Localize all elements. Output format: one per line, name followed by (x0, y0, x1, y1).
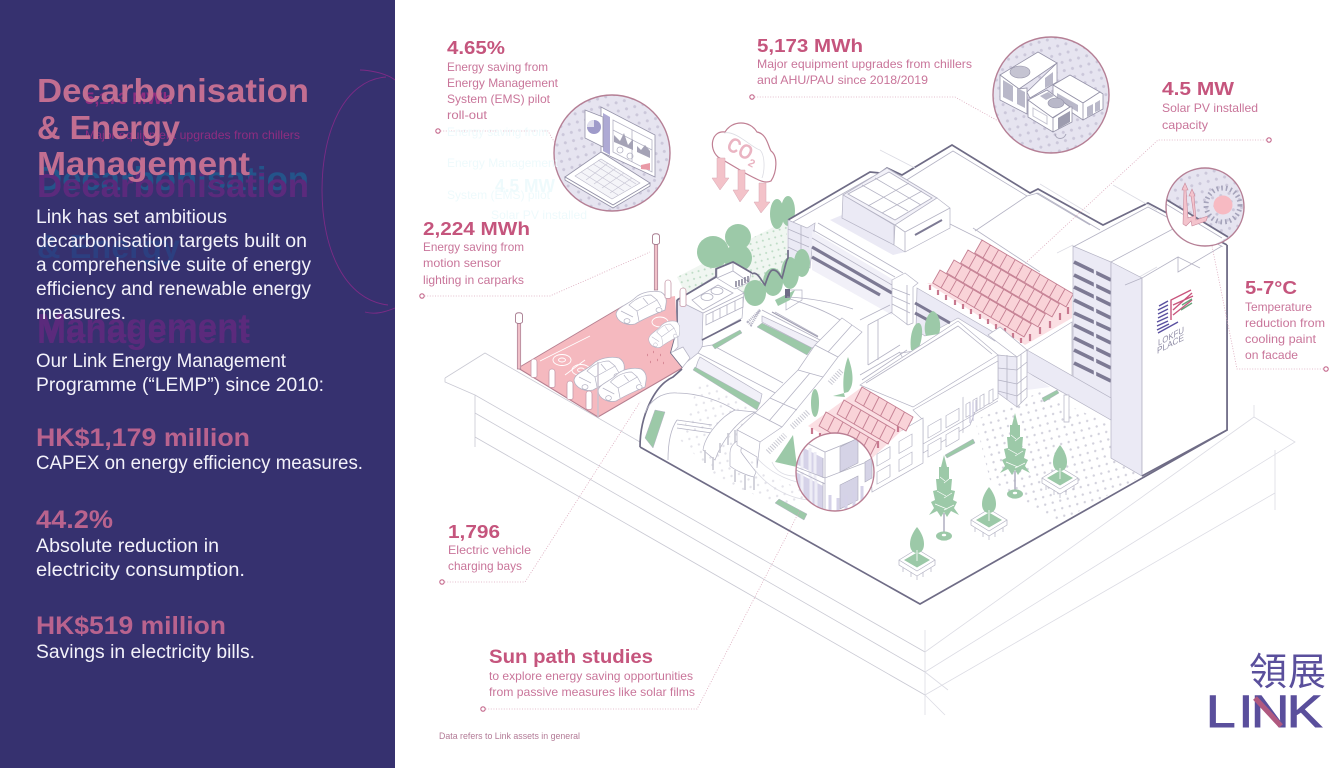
CO2 cloud with down arrows: CO (723, 133, 757, 165)
stat: savings: HK$519 million (36, 612, 226, 640)
ghost print marks: 5,173 MWh (85, 89, 173, 108)
ramp two (730, 438, 756, 477)
courtyard dotted paving (975, 392, 1142, 522)
callout: cooling paint: 5-7°C (1245, 278, 1297, 298)
lavender wall behind large solar array (916, 288, 1000, 341)
stat: electricity reduction: Absolute reduction in (36, 536, 219, 557)
callout: solar PV: Solar PV installed (1162, 101, 1258, 115)
ghost print marks: & Energy (37, 228, 181, 265)
callout: cooling paint: reduction from (1245, 316, 1325, 330)
stat: CAPEX: CAPEX on energy efficiency measures. (36, 453, 363, 474)
callout icon: sun and cooling paint (1166, 168, 1244, 250)
escalator (737, 305, 907, 468)
faint ghost printing on white area: System (EMS) pilot (447, 188, 551, 202)
callout: EMS saving: Energy Management (447, 76, 559, 90)
trees behind roof (911, 311, 940, 352)
callout: solar PV (1162, 79, 1258, 132)
intro text: a comprehensive suite of energy (36, 255, 311, 276)
callout: motion sensor lighting: lighting in carparks (423, 273, 524, 287)
isometric building illustration: Lok Fu Place (516, 145, 1227, 604)
ghost print marks: Decarbonisation (37, 160, 309, 197)
callout: cooling paint: Temperature (1245, 300, 1312, 314)
callout: solar PV: 4.5 MW (1162, 79, 1234, 99)
stat: electricity reduction: 44.2% (36, 506, 113, 534)
lamp posts (516, 234, 660, 417)
title: & Energy (37, 109, 181, 146)
callout: EV charging bays (448, 522, 531, 573)
callout: equipment upgrades: Major equipment upgrades from chillers (757, 57, 972, 71)
callout: sun path studies: from passive measures like solar films (489, 685, 695, 699)
stat: CAPEX (36, 424, 363, 474)
CO2 cloud with down arrows: 2 (746, 157, 757, 171)
callout: equipment upgrades: and AHU/PAU since 2018/2019 (757, 73, 928, 87)
callout: EV charging bays: charging bays (448, 559, 522, 573)
rooftop masses (788, 145, 1227, 320)
concrete grid block (988, 327, 1027, 357)
skylight block (830, 168, 950, 255)
callout: EMS saving: 4.65% (447, 38, 505, 58)
upper deck beside tower (1027, 322, 1072, 392)
faint ghost printing on white area: 4.5 MW (495, 176, 555, 196)
intro text: decarbonisation targets built on (36, 231, 307, 252)
central plaza and terraces (693, 297, 853, 410)
courtyard wing windows (870, 361, 998, 492)
leader lines (420, 95, 1328, 711)
intro text: efficiency and renewable energy (36, 279, 311, 300)
mini building beside carpark (670, 262, 752, 368)
faint ghost printing on white area (447, 125, 587, 222)
footnote: Data refers to Link assets in general (439, 731, 580, 742)
callout: solar PV: capacity (1162, 118, 1208, 132)
callout: equipment upgrades (757, 36, 972, 87)
callout: equipment upgrades: 5,173 MWh (757, 36, 863, 56)
charging bay markers (540, 317, 668, 376)
ground plinth lines (445, 353, 1295, 715)
tower with LOKFU PLACE signage (1073, 207, 1227, 476)
intro text (36, 207, 311, 324)
callout: sun path studies: to explore energy saving opportunities (489, 669, 693, 683)
courtyard conifers (929, 413, 1030, 541)
callout: EV charging bays: 1,796 (448, 522, 500, 542)
tree cluster (697, 224, 752, 272)
callout: motion sensor lighting (423, 219, 530, 287)
callout: sun path studies: Sun path studies (489, 647, 653, 668)
Link logo (1206, 641, 1326, 737)
CO2 cloud with down arrows (712, 123, 776, 213)
left panel (0, 0, 395, 768)
ghost print marks: Major equipment upgrades from chillers (85, 128, 300, 142)
chargers (531, 280, 686, 410)
programme text (36, 351, 324, 396)
narrow trees and green wedge (775, 357, 853, 520)
callout: EMS saving (447, 38, 559, 122)
ramp one (703, 410, 755, 460)
title: Management (37, 145, 250, 182)
callout: EMS saving: System (EMS) pilot (447, 92, 551, 106)
long lavender facade with dark stripes (788, 220, 903, 315)
programme text: Programme (“LEMP”) since 2010: (36, 375, 324, 396)
courtyard planters (899, 445, 1078, 580)
callout: motion sensor lighting: 2,224 MWh (423, 219, 530, 239)
back garden (677, 220, 787, 322)
stat: savings (36, 612, 255, 663)
tall trees behind (770, 196, 795, 229)
pillar (892, 273, 918, 325)
LF logo stripes (1157, 290, 1193, 333)
callout: cooling paint (1245, 278, 1325, 362)
callout: motion sensor lighting: motion sensor (423, 256, 501, 270)
ghost print marks: Decarbonisation (37, 167, 309, 204)
callout: EMS saving: Energy saving from (447, 60, 548, 74)
circle outline: facade (796, 433, 874, 511)
Link logo: 領展 (1249, 641, 1326, 696)
faint ghost printing on white area: Energy saving from (447, 125, 548, 139)
callout: cooling paint: cooling paint (1245, 332, 1317, 346)
callout: motion sensor lighting: Energy saving from (423, 240, 524, 254)
tower signage: PLACE (1157, 332, 1184, 357)
lower terrace dotted paving (680, 378, 812, 510)
callout: EMS saving: roll-out (447, 108, 488, 122)
electric cars (574, 291, 680, 402)
facade detail circle (795, 433, 874, 515)
faint ghost printing on white area: Energy Management (447, 156, 559, 170)
red carpark deck (516, 234, 686, 417)
callout icon: laptop energy management system (554, 95, 670, 211)
central lower roof (860, 273, 1027, 407)
stat: electricity reduction (36, 506, 245, 581)
title (37, 72, 309, 182)
ghost print marks (37, 70, 395, 350)
small solar PV array (808, 387, 913, 462)
stripes behind lower roof (915, 303, 950, 324)
intro text: Link has set ambitious (36, 207, 227, 228)
tower signage: LOKFU (1158, 325, 1184, 349)
stat: CAPEX: HK$1,179 million (36, 424, 250, 452)
ghost print marks: Management (37, 313, 250, 350)
title: Decarbonisation (37, 72, 309, 109)
callout icon: chiller and AHU units (993, 37, 1109, 153)
intro text: measures. (36, 303, 126, 324)
curved terrace and garden edge (640, 369, 812, 500)
stat: electricity reduction: electricity consumption. (36, 560, 245, 581)
Link logo: LINK (1206, 687, 1323, 737)
base ground outline (640, 245, 1227, 604)
faint ghost printing on white area: Solar PV installed (491, 208, 587, 222)
tree row (744, 249, 810, 310)
callout: sun path studies (489, 647, 695, 699)
sky bridge (1027, 350, 1111, 422)
ghost print marks: Management (37, 307, 250, 344)
stat: savings: Savings in electricity bills. (36, 642, 255, 663)
large solar PV array (927, 240, 1073, 345)
callout: cooling paint: on facade (1245, 348, 1298, 362)
callout: EV charging bays: Electric vehicle (448, 543, 531, 557)
programme text: Our Link Energy Management (36, 351, 287, 372)
